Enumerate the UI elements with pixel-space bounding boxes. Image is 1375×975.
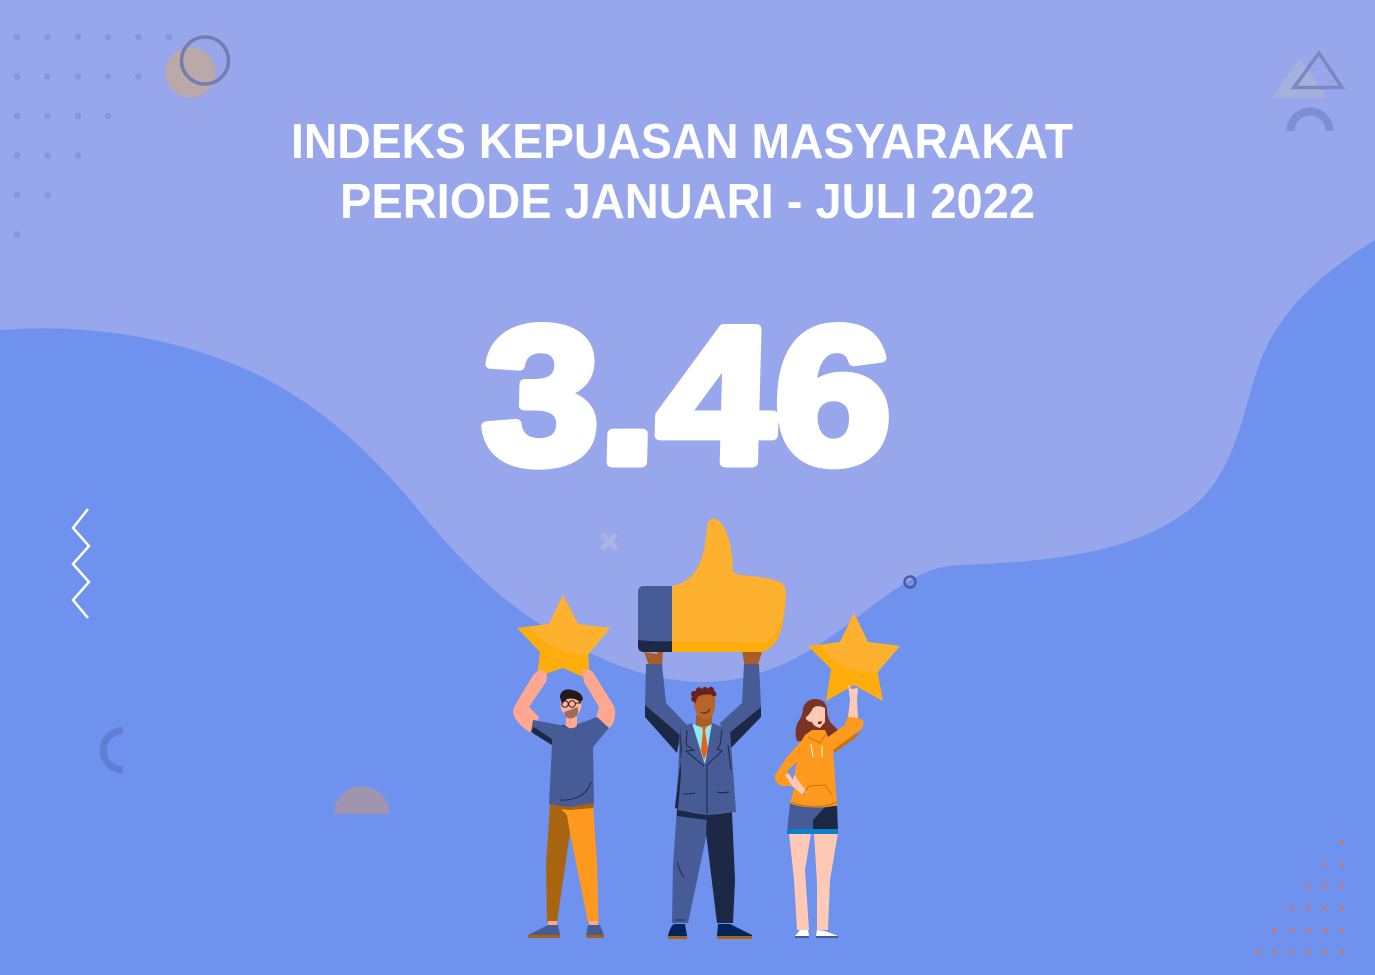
right pant leg: [559, 805, 598, 922]
hoodie: [775, 715, 863, 807]
icon: right star: [808, 613, 900, 718]
hoodie shadow under arm: [833, 731, 862, 753]
ankles and shoes: [548, 921, 598, 926]
curly hair: [796, 699, 838, 742]
figure: man with glasses: [513, 670, 615, 938]
title: PERIODE JANUARI - JULI 2022: [340, 175, 1035, 229]
left pant leg: [546, 805, 570, 922]
icon: thumbs up: [638, 519, 786, 652]
decoration: small ring: [904, 576, 916, 588]
t-shirt: [531, 717, 609, 807]
icon: left star: [517, 595, 610, 680]
left arm: [645, 664, 687, 750]
decoration: top-left dot grid: [14, 34, 172, 238]
figure: woman in hoodie: [775, 699, 863, 938]
head: [566, 716, 577, 728]
arms: [513, 670, 547, 734]
decoration: beige circle and ring: [166, 37, 228, 98]
bare arm on hip: [785, 772, 807, 795]
decoration: half dome: [334, 786, 390, 814]
sneakers: [795, 930, 838, 936]
decoration: cross: [602, 534, 616, 549]
face: [806, 706, 825, 728]
jacket: [675, 723, 736, 815]
decoration: triangles and arch: [1272, 53, 1342, 131]
decoration: orange dot triangle: [1256, 841, 1344, 954]
tie: [701, 726, 708, 760]
raised forearm: [848, 684, 858, 718]
score value: 3.46: [480, 288, 894, 504]
neck and shirt: [696, 715, 712, 730]
left trouser leg: [672, 808, 707, 923]
legs: [789, 833, 838, 930]
head: [693, 692, 715, 720]
right trouser leg: [706, 812, 735, 923]
title: [291, 115, 1073, 229]
right arm: [720, 664, 761, 748]
title: INDEKS KEPUASAN MASYARAKAT: [291, 115, 1073, 169]
decoration: white zigzag: [73, 509, 89, 618]
background blue wave: [0, 240, 1375, 975]
decoration: crescent arc: [100, 727, 123, 774]
figure: man in suit: [644, 644, 762, 939]
shoes: [668, 924, 752, 936]
shorts: [787, 803, 838, 833]
hands: [644, 644, 762, 668]
cuff: [638, 586, 672, 652]
